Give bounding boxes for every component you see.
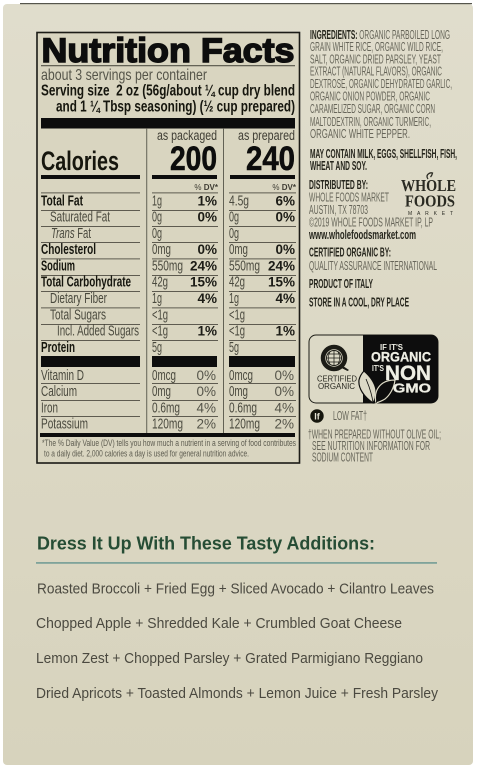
- calories header: 240: [246, 140, 295, 178]
- column: as prepared values: 0%: [275, 210, 295, 225]
- heading: Nutrition Facts: Nutrition Facts: [42, 32, 294, 70]
- vitamins and minerals: 0mg: [229, 384, 248, 400]
- certification statement: CERTIFIED ORGANIC BY:: [309, 246, 391, 260]
- column: as prepared values: 1%: [275, 324, 295, 339]
- vitamins and minerals: 2%: [274, 416, 294, 432]
- column: as packaged values: 0mg: [152, 242, 171, 258]
- vitamins and minerals: 0.6mg: [229, 401, 257, 417]
- separator bars: [41, 356, 295, 367]
- nutrient labels: Total Carbohydrate: [41, 275, 131, 291]
- vitamins and minerals: Calcium: [41, 384, 77, 400]
- column: as packaged values: 0g: [152, 210, 162, 226]
- serving information: about 3 servings per container: [41, 67, 208, 84]
- nutrient labels: Total Sugars: [50, 307, 106, 323]
- certification statement: [309, 246, 437, 273]
- calories header: Calories: [41, 146, 119, 176]
- column: as prepared values: 0g: [229, 226, 239, 242]
- serving information: Serving size 2 oz (56g/about ¼ cup dry blend: [41, 83, 295, 100]
- icon: low fat: lf: [314, 411, 321, 421]
- badge: certified organic and non GMO: NON: [385, 362, 431, 385]
- nutrient labels: Dietary Fiber: [50, 291, 107, 307]
- nutrient labels: Protein: [41, 340, 75, 356]
- column: as prepared values: 5g: [229, 340, 239, 356]
- nutrient labels: [41, 194, 139, 356]
- vitamins and minerals: 0.6mg: [152, 401, 180, 417]
- column: as prepared values: 24%: [268, 259, 295, 274]
- panel: nutrition facts: [37, 32, 300, 463]
- list of suggested additions: Chopped Apple + Shredded Kale + Crumbled Goat Cheese: [36, 615, 402, 632]
- logo: Whole Foods Market: WHOLE: [401, 176, 456, 195]
- distributor text: [308, 178, 433, 242]
- allergen statement: [310, 147, 457, 173]
- badge: certified organic and non GMO: GMO: [393, 380, 431, 396]
- serving information: [41, 67, 295, 116]
- column: as prepared values: 4%: [275, 291, 295, 306]
- low fat label: LOW FAT†: [333, 409, 367, 423]
- badge: certified organic and non GMO: [309, 335, 438, 403]
- column: as packaged values: 1g: [152, 194, 162, 210]
- calories header: 200: [170, 140, 217, 178]
- column: as prepared values: 0mg: [229, 242, 248, 258]
- vitamins and minerals: 0%: [196, 368, 216, 383]
- vitamins and minerals: 0mcg: [152, 368, 176, 384]
- olive oil footnote: SODIUM CONTENT: [312, 451, 373, 465]
- badge: certified organic and non GMO: ORGANIC: [371, 350, 431, 364]
- column: as packaged values: 1g: [152, 291, 162, 307]
- serving information: and 1 ¼ Tbsp seasoning) (½ cup prepared): [56, 99, 295, 116]
- list of suggested additions: Roasted Broccoli + Fried Egg + Sliced Avocado + Cilantro Leaves: [37, 580, 434, 597]
- distributor text: DISTRIBUTED BY:: [309, 178, 368, 192]
- vitamins and minerals: 4%: [274, 401, 294, 416]
- column: as packaged values: <1g: [152, 324, 168, 340]
- calories header: as prepared: [238, 128, 295, 143]
- vitamins and minerals: Iron: [41, 401, 58, 417]
- column: as packaged values: 24%: [190, 259, 217, 274]
- vitamins and minerals: 120mg: [229, 416, 260, 432]
- ingredients text: [310, 28, 452, 141]
- list of suggested additions: Dried Apricots + Toasted Almonds + Lemon Juice + Fresh Parsley: [36, 685, 438, 702]
- calories header: % DV*: [194, 183, 219, 192]
- column: as prepared values: [229, 194, 295, 356]
- column: as packaged values: 0%: [197, 242, 217, 257]
- column: as packaged values: [152, 194, 217, 356]
- column: as packaged values: 1%: [197, 324, 217, 339]
- column: as packaged values: 42g: [152, 275, 168, 291]
- logo: Whole Foods Market: FOODS: [405, 192, 455, 211]
- column: as prepared values: 550mg: [229, 259, 260, 275]
- daily value footnote: to a daily diet. 2,000 calories a day is used for general nutrition advice.: [44, 449, 249, 459]
- vitamins and minerals: Vitamin D: [41, 368, 84, 384]
- calories header: as packaged: [157, 128, 217, 143]
- column: as prepared values: 4.5g: [229, 194, 249, 210]
- nutrient labels: Total Fat: [41, 194, 83, 210]
- column: as packaged values: 1%: [197, 194, 217, 209]
- distributor text: www.wholefoodsmarket.com: [308, 228, 416, 242]
- calories header: % DV*: [272, 183, 297, 192]
- daily value footnote: [42, 438, 296, 459]
- heading: Dress It Up: Dress It Up With These Tasty Additions:: [37, 533, 375, 553]
- vitamins and minerals: 0%: [274, 368, 294, 383]
- vitamins and minerals: 0mcg: [229, 368, 253, 384]
- calories header: [41, 128, 297, 192]
- column: as prepared values: <1g: [229, 307, 245, 323]
- nutrient labels: Trans Fat: [51, 226, 91, 242]
- column: as prepared values: 0%: [275, 242, 295, 257]
- badge: certified organic and non GMO: ORGANIC: [318, 382, 355, 391]
- badge: certified organic and non GMO: CERTIFIED: [317, 375, 357, 384]
- distributor text: WHOLE FOODS MARKET: [309, 191, 389, 205]
- vitamins and minerals: 2%: [196, 416, 216, 432]
- ingredients text: ORGANIC WHITE PEPPER.: [310, 127, 410, 141]
- column: as prepared values: 15%: [268, 275, 295, 290]
- vitamins and minerals: 0%: [196, 384, 216, 399]
- vitamins and minerals: 0%: [274, 384, 294, 399]
- nutrient labels: Cholesterol: [41, 242, 96, 258]
- daily value footnote: *The % Daily Value (DV) tells you how much a nutrient in a serving of food contributes: [42, 438, 296, 448]
- list of suggested additions: [36, 580, 438, 702]
- table rules: [41, 192, 296, 417]
- logo: Whole Foods Market: [401, 173, 456, 217]
- origin and storage: [309, 277, 409, 310]
- column: as packaged values: 15%: [190, 275, 217, 290]
- column: as prepared values: 6%: [275, 194, 295, 209]
- column: as packaged values: 4%: [197, 291, 217, 306]
- column: as packaged values: <1g: [152, 307, 168, 323]
- vitamins and minerals: 120mg: [152, 416, 183, 432]
- logo: Whole Foods Market: MARKET: [408, 211, 453, 217]
- column: as prepared values: <1g: [229, 324, 245, 340]
- column: as packaged values: 0%: [197, 210, 217, 225]
- icon: QAI globe: [323, 347, 349, 371]
- column: as packaged values: 550mg: [152, 259, 183, 275]
- vitamins and minerals: [41, 368, 294, 432]
- badge: certified organic and non GMO: IT'S: [372, 364, 385, 373]
- olive oil footnote: [308, 427, 441, 465]
- icon: low fat: [310, 409, 324, 423]
- vitamins and minerals: 0mg: [152, 384, 171, 400]
- allergen statement: WHEAT AND SOY.: [310, 159, 367, 173]
- column: as prepared values: 0g: [229, 210, 239, 226]
- vitamins and minerals: 4%: [196, 401, 216, 416]
- nutrient labels: Incl. Added Sugars: [57, 324, 139, 340]
- distributor text: AUSTIN, TX 78703: [309, 203, 368, 217]
- column: as prepared values: 1g: [229, 291, 239, 307]
- badge: certified organic and non GMO: IF IT'S: [380, 343, 404, 352]
- icon: leaves: [359, 371, 395, 403]
- column: as prepared values: 42g: [229, 275, 245, 291]
- column: as packaged values: 5g: [152, 340, 162, 356]
- list of suggested additions: Lemon Zest + Chopped Parsley + Grated Parmigiano Reggiano: [36, 650, 423, 667]
- vitamins and minerals: Potassium: [41, 416, 88, 432]
- origin and storage: PRODUCT OF ITALY: [309, 277, 373, 291]
- nutrient labels: Saturated Fat: [50, 210, 110, 226]
- column: as packaged values: 0g: [152, 226, 162, 242]
- nutrient labels: Sodium: [41, 259, 75, 275]
